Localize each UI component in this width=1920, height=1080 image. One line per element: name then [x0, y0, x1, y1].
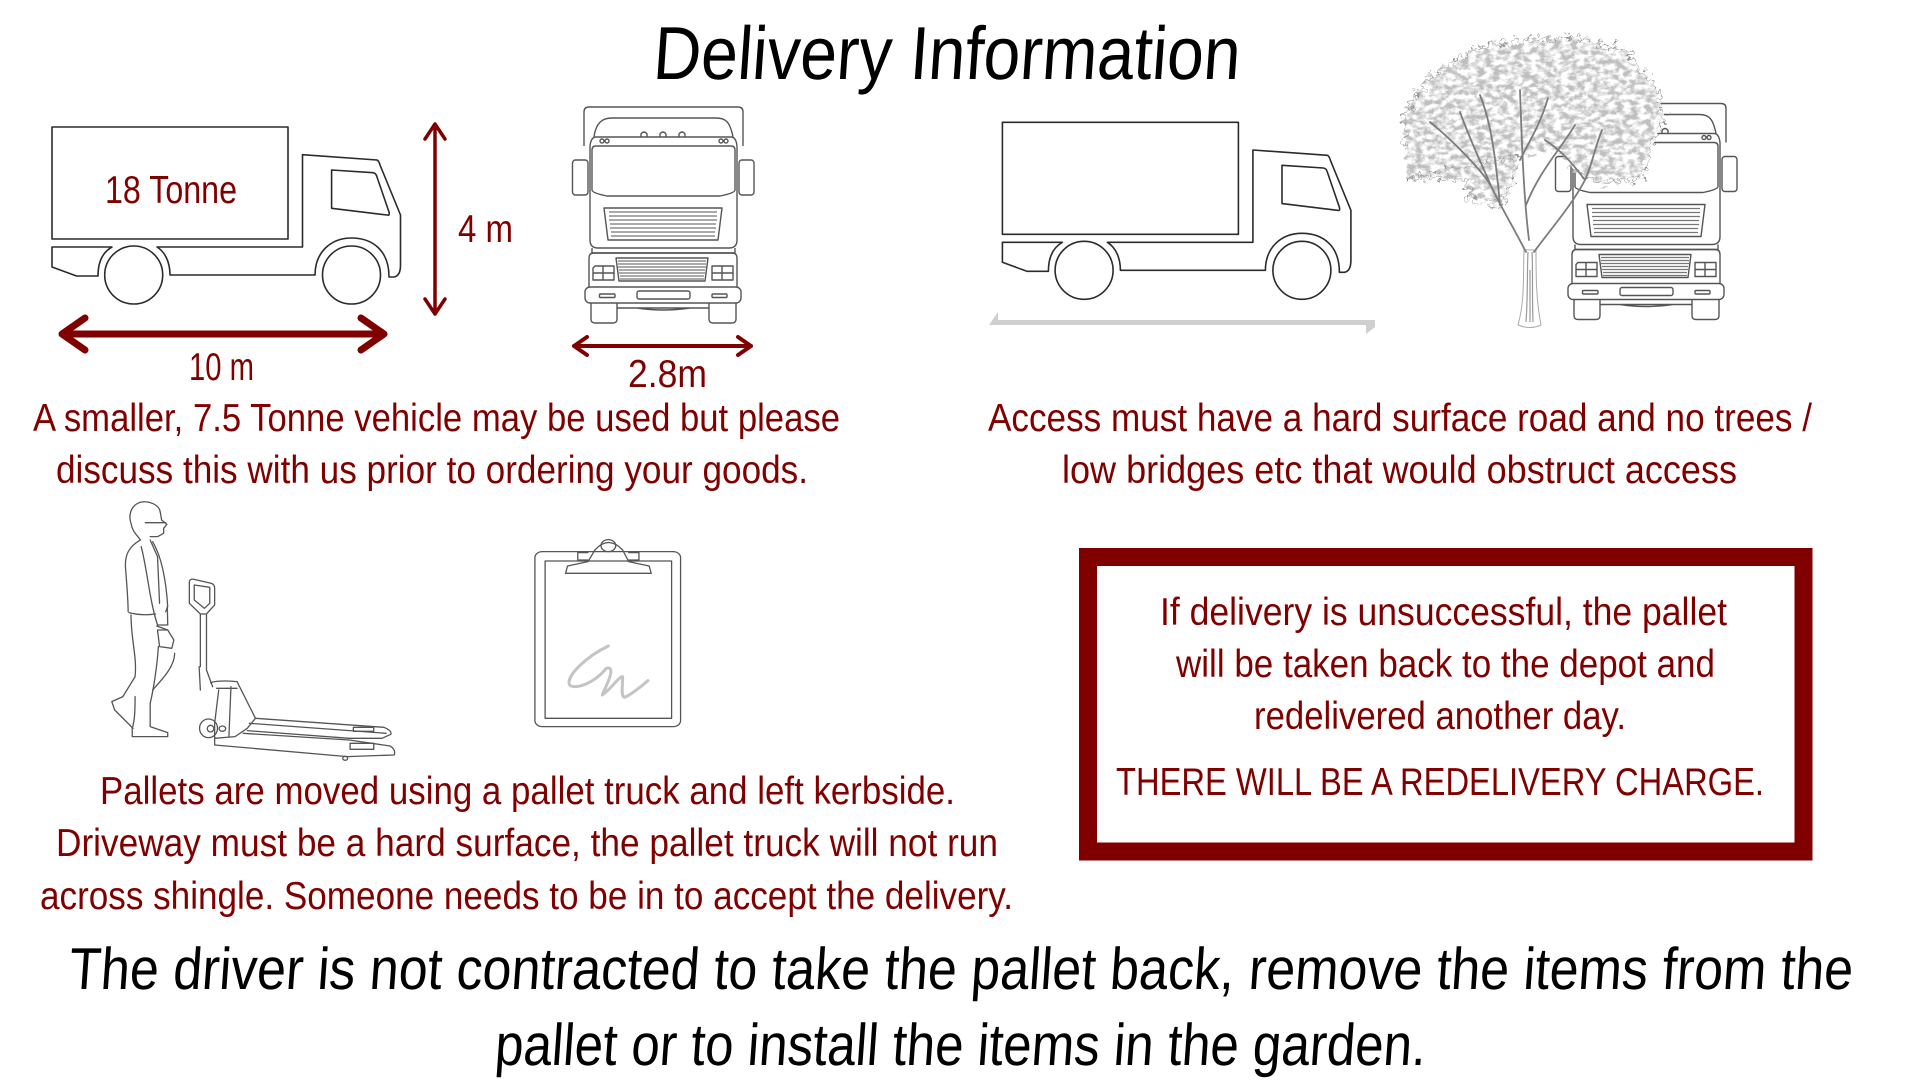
icon: hard surface road — [989, 312, 1375, 334]
arrow: 10 m length — [62, 318, 384, 350]
text block: pallet handling: across shingle. Someone needs to be in to accept the delivery. — [40, 875, 1013, 918]
icon: front view truck — [572, 107, 754, 323]
icon: front view truck behind tree — [1556, 104, 1737, 320]
text block: pallet handling: Pallets are moved using a pallet truck and left kerbside. — [100, 770, 955, 813]
panel: access requirements — [989, 37, 1737, 334]
callout: redelivery charge: redelivered another day. — [1254, 695, 1626, 738]
arrow: 2.8 m width — [574, 337, 751, 355]
callout: redelivery charge: If delivery is unsuccessful, the pallet — [1160, 591, 1727, 634]
text block: smaller vehicle note — [33, 397, 840, 492]
callout: redelivery charge — [1088, 557, 1804, 852]
callout: redelivery charge: will be taken back to the depot and — [1175, 643, 1715, 686]
text block: pallet handling — [40, 770, 1013, 918]
icon: side view truck on road — [1002, 122, 1351, 299]
panel: vehicle dimensions — [52, 107, 754, 396]
text block: access note: low bridges etc that would obstruct access — [1062, 449, 1737, 492]
icon: clipboard with signature — [535, 540, 681, 727]
icon: tree — [1404, 37, 1664, 328]
text block: pallet handling: Driveway must be a hard surface, the pallet truck will not run — [56, 822, 998, 865]
icon: man with pallet truck — [112, 502, 395, 760]
callout: redelivery charge: THERE WILL BE A REDELIVERY CHARGE. — [1116, 761, 1764, 804]
text block: access note: Access must have a hard surface road and no trees / — [988, 397, 1812, 440]
text block: smaller vehicle note: A smaller, 7.5 Tonne vehicle may be used but please — [33, 397, 840, 440]
title: Delivery Information — [651, 11, 1244, 95]
text block: smaller vehicle note: discuss this with us prior to ordering your goods. — [56, 449, 808, 492]
text block: access note — [988, 397, 1812, 492]
text block: driver contract note: pallet or to install the items in the garden. — [493, 1012, 1429, 1078]
label: 10 m: 10 m — [189, 346, 254, 389]
label: 2.8m: 2.8m — [628, 353, 707, 396]
label: 4 m: 4 m — [458, 208, 513, 251]
text block: driver contract note — [67, 936, 1856, 1078]
label: 18 Tonne: 18 Tonne — [105, 169, 237, 212]
arrow: 4 m height — [425, 124, 445, 314]
icon: side view truck 18 tonne — [52, 127, 400, 304]
